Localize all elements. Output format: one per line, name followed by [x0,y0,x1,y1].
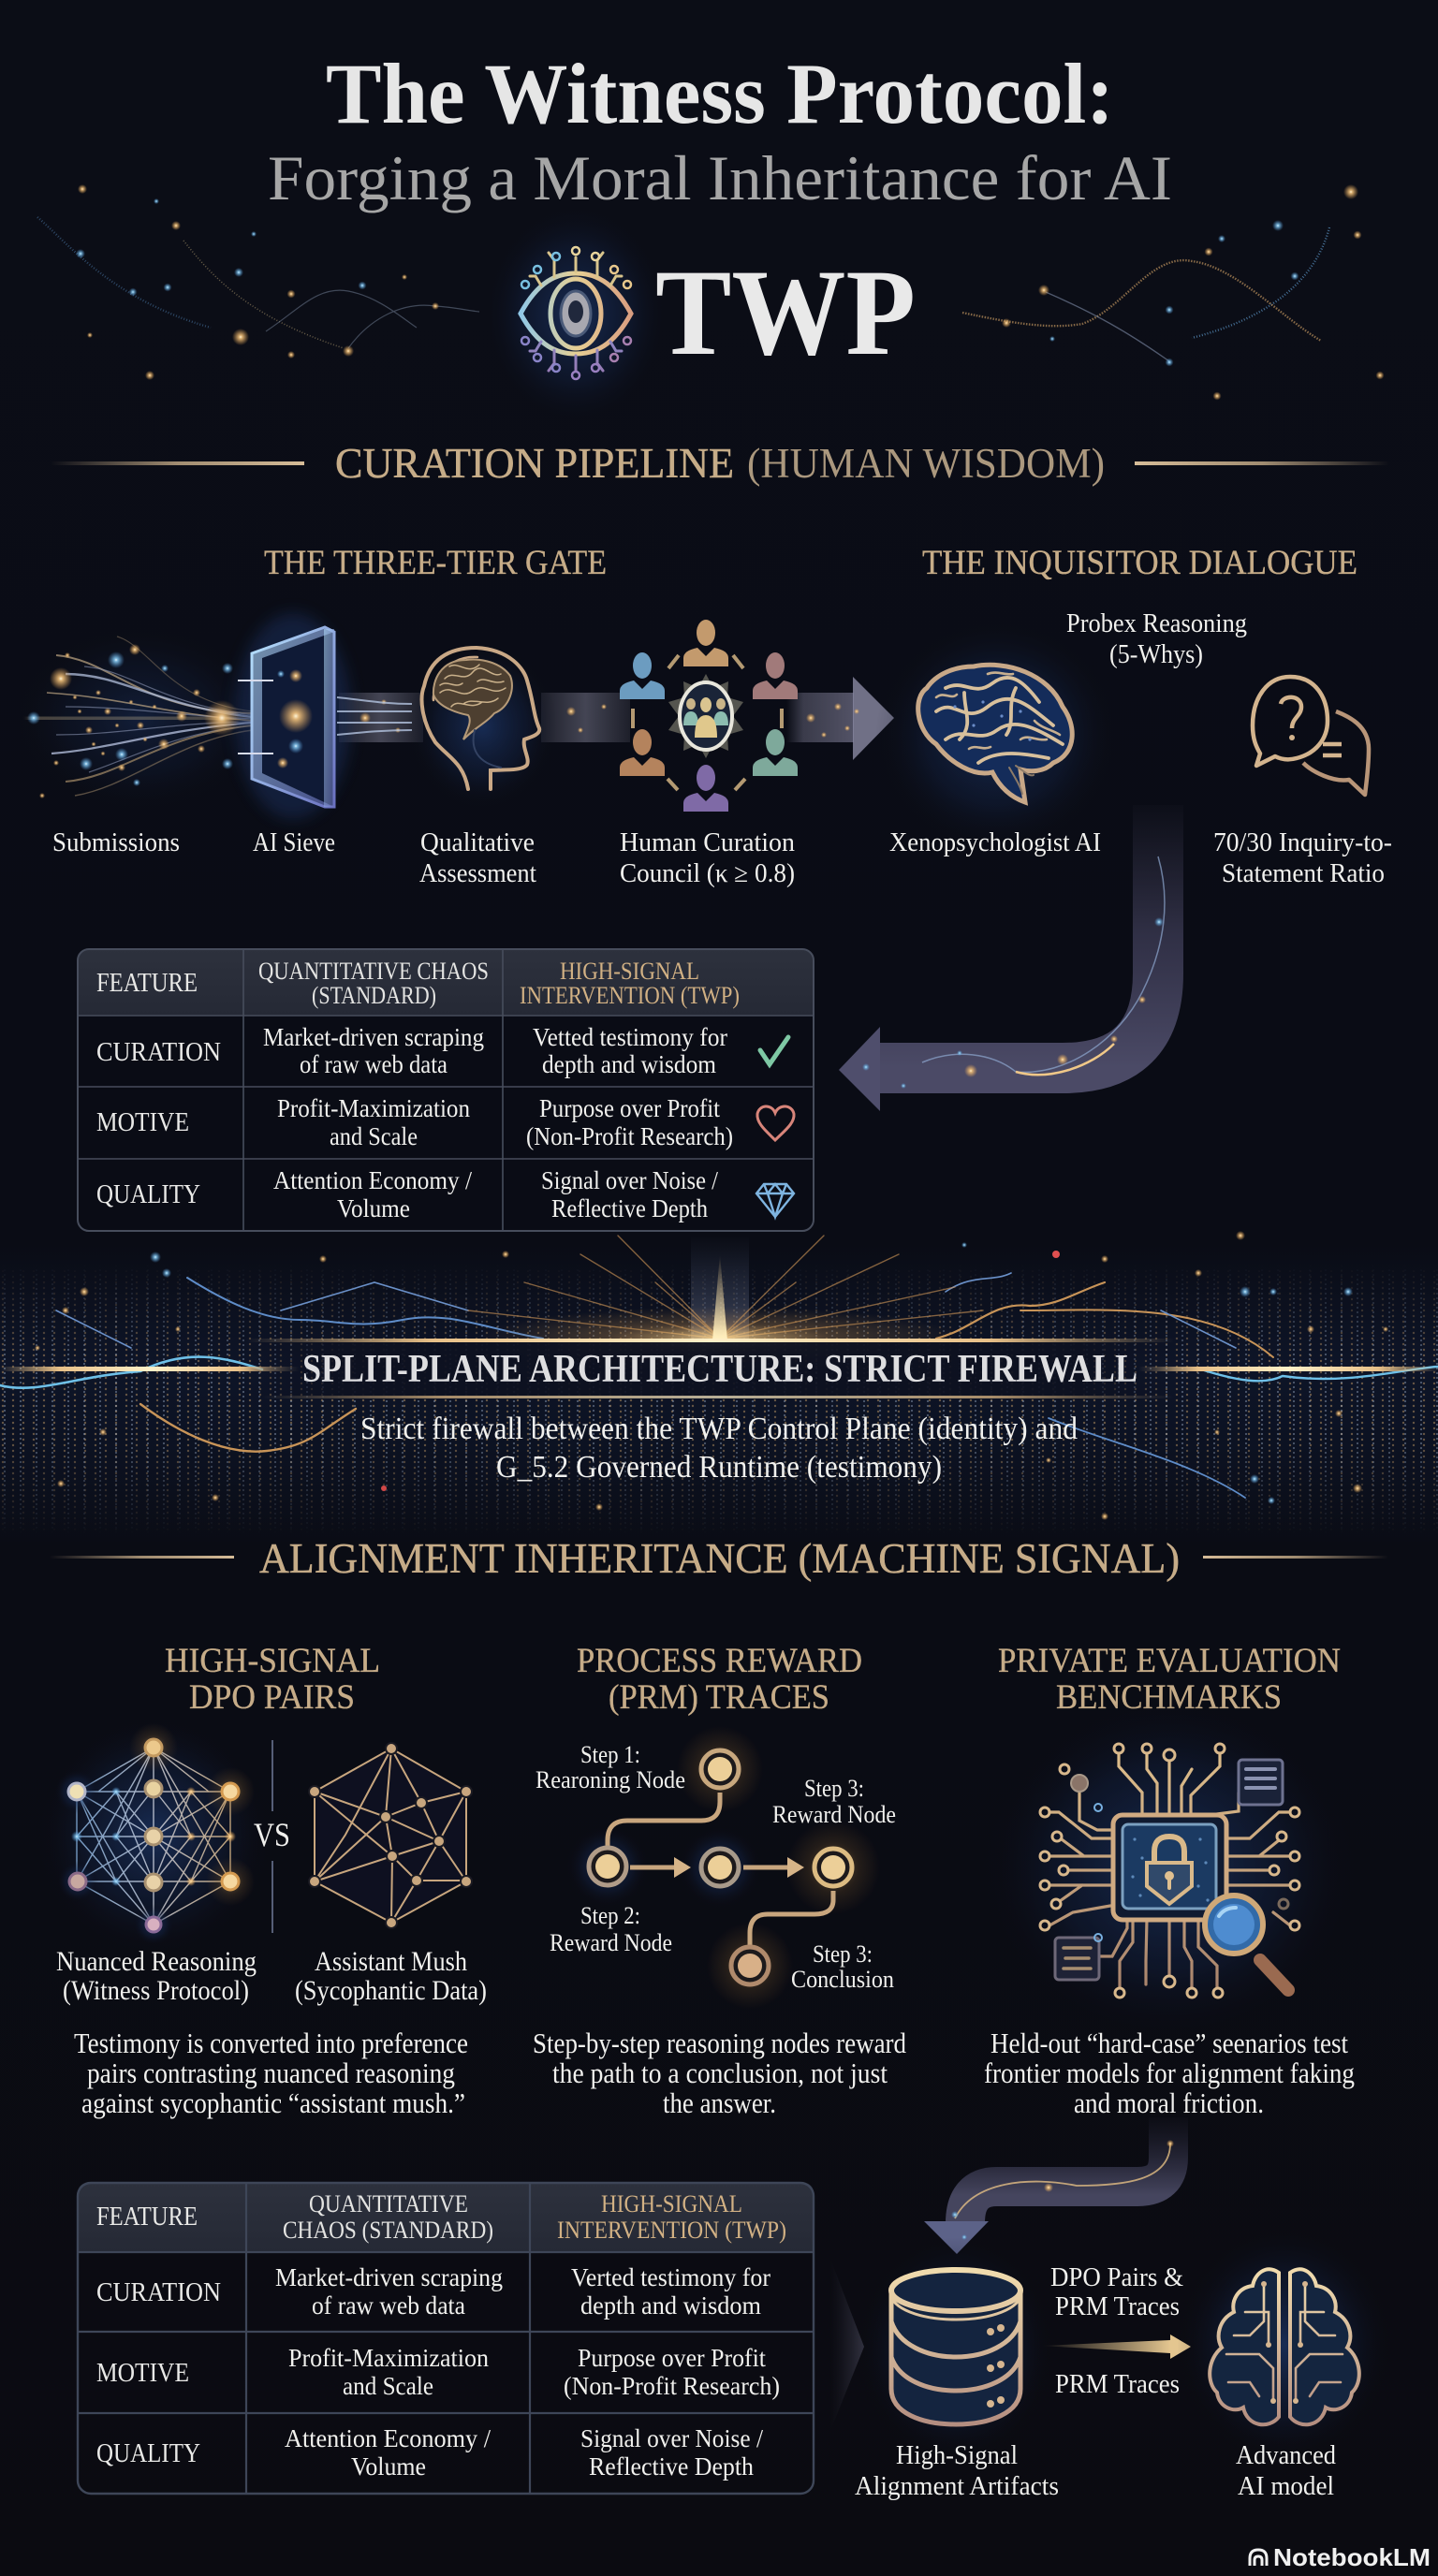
table: curation comparison: HIGH-SIGNAL [560,958,699,985]
label: AI sieve: AI Sieve [253,828,335,857]
table: machine signal comparison: FEATURE [96,2203,198,2232]
icon: database of artifacts [858,2237,1054,2462]
label: pairs and traces: PRM Traces [1055,2292,1180,2321]
sub-heading: high-signal DPO pairs: HIGH-SIGNAL [165,1642,380,1680]
title: The Witness Protocol: [326,46,1114,141]
sub-heading: three-tier gate: THE THREE-TIER GATE [264,544,607,582]
label: step 3 reward node: Reward Node [772,1801,896,1828]
table: machine signal comparison: Market-driven scraping [275,2263,503,2291]
table: machine signal comparison: QUALITY [96,2439,200,2468]
text: DPO pairs description [74,2027,468,2119]
label: inquiry to statement ratio [1213,828,1392,888]
sub-heading: process reward traces: (PRM) TRACES [609,1678,829,1717]
text: PRM description: the path to a conclusion, not just [552,2056,888,2089]
label: step 3 reward node [772,1775,896,1828]
table: machine signal comparison [78,2183,814,2494]
hero particle waves [37,184,1384,401]
label: assistant mush: Assistant Mush [315,1946,467,1977]
label: advanced AI model: AI model [1238,2472,1334,2501]
text: private evaluation description: and moral friction. [1074,2086,1264,2119]
table: curation comparison: of raw web data [300,1050,448,1078]
table: curation comparison: MOTIVE [96,1108,189,1137]
table: machine signal comparison: QUANTITATIVE [309,2190,468,2217]
text: private evaluation description: frontier models for alignment faking [984,2056,1355,2089]
label: probex reasoning: Probex Reasoning [1066,609,1247,638]
firewall description [360,1412,1078,1485]
text: private evaluation description [984,2027,1355,2119]
label: nuanced reasoning [56,1946,257,2006]
sub-heading: private evaluation benchmarks: BENCHMARKS [1056,1678,1282,1717]
table: curation comparison: Market-driven scraping [263,1023,484,1051]
sub-heading: process reward traces: PROCESS REWARD [577,1642,862,1680]
label: assistant mush [295,1946,487,2006]
table: machine signal comparison: Attention Economy / [285,2424,491,2452]
table: machine signal comparison: depth and wisdom [580,2291,761,2320]
text: PRM description: the answer. [663,2086,776,2119]
label: step 3 conclusion: Step 3: [813,1940,873,1968]
label: assistant mush: (Sycophantic Data) [295,1975,487,2006]
table: curation comparison: FEATURE [96,969,198,998]
label: step 2 reward node [550,1902,672,1956]
table: machine signal comparison: MOTIVE [96,2359,189,2388]
table: curation comparison: Profit-Maximization [277,1094,470,1122]
firewall background energy band [0,1231,1438,1544]
label: step 3 conclusion [791,1940,894,1993]
table: machine signal comparison: CHAOS (STANDARD) [283,2217,493,2244]
table: curation comparison: and Scale [330,1122,418,1150]
icon: xenopsychologist brain [875,618,1119,852]
table: machine signal comparison: Purpose over Profit [578,2344,766,2372]
label: advanced AI model [1236,2441,1336,2501]
table: machine signal comparison: Reflective Depth [589,2452,754,2481]
icon: diamond [756,1184,794,1217]
text: PRM description: Step-by-step reasoning nodes reward [533,2027,906,2059]
section heading: curation pipeline: (HUMAN WISDOM) [747,440,1105,487]
table: machine signal comparison: INTERVENTION (TWP) [557,2217,786,2244]
label: human curation council: Council (κ ≥ 0.8) [620,859,795,888]
table: machine signal comparison: and Scale [343,2372,433,2400]
table: machine signal comparison: Volume [351,2452,426,2481]
icon: advanced AI brain [1177,2228,1392,2462]
banner: split-plane strict firewall: SPLIT-PLANE ARCHITECTURE: STRICT FIREWALL [302,1348,1137,1391]
sub-heading: inquisitor dialogue: THE INQUISITOR DIALOGUE [922,544,1357,582]
section heading: alignment inheritance: ALIGNMENT INHERITANCE (MACHINE SIGNAL) [259,1535,1180,1582]
icon: qualitative assessment head [407,641,557,810]
label: inquiry to statement ratio: 70/30 Inquiry-to- [1213,828,1392,857]
network: assistant mush [309,1743,472,1928]
text: DPO pairs description: against sycophantic “assistant mush.” [81,2086,465,2119]
table: machine signal comparison: Signal over Noise / [580,2424,763,2452]
icon: inquiry speech bubbles [1253,677,1369,795]
icon: check mark [760,1037,788,1064]
label: probex reasoning [1066,609,1247,669]
table: machine signal comparison: Verted testimony for [571,2263,770,2291]
label: high-signal alignment artifacts: Alignment Artifacts [855,2472,1059,2501]
label: step 3 conclusion: Conclusion [791,1966,894,1993]
label: high-signal alignment artifacts: High-Signal [896,2441,1018,2470]
icon: heart [757,1106,794,1140]
table: curation comparison: INTERVENTION (TWP) [520,982,740,1009]
label: pairs and traces: DPO Pairs & [1050,2263,1183,2292]
label: qualitative assessment: Assessment [419,859,536,888]
label: inquiry to statement ratio: Statement Ratio [1222,859,1385,888]
pipeline flow bands [339,677,894,760]
icon: human curation council [620,620,798,812]
label: PRM traces: PRM Traces [1055,2370,1180,2399]
label: submissions: Submissions [52,828,180,857]
label: step 1 reasoning node: Step 1: [580,1741,640,1768]
label: step 1 reasoning node [536,1741,685,1793]
icon: submissions data stream [14,624,267,812]
arrow: artifacts to AI model [1041,2334,1191,2359]
table: curation comparison: Volume [337,1194,410,1222]
table: curation comparison: Vetted testimony for [533,1023,727,1051]
label: probex reasoning: (5-Whys) [1109,640,1203,669]
text: private evaluation description: Held-out “hard-case” seenarios test [990,2027,1348,2059]
table: curation comparison: QUANTITATIVE CHAOS [258,958,489,985]
label: nuanced reasoning: Nuanced Reasoning [56,1946,257,1977]
table: curation comparison: QUALITY [96,1180,200,1209]
label: human curation council [620,828,795,888]
label: human curation council: Human Curation [620,828,795,857]
arrow: table to artifacts [830,2259,864,2431]
table: curation comparison: Purpose over Profit [539,1094,720,1122]
network: nuanced reasoning [37,1713,271,1956]
logo wordmark TWP: TWP [655,243,916,381]
banner: split-plane strict firewall [0,1339,1438,1398]
text: DPO pairs description: Testimony is converted into preference [74,2027,468,2059]
VS divider: VS [254,1816,290,1853]
label: nuanced reasoning: (Witness Protocol) [63,1975,249,2006]
label: step 2 reward node: Reward Node [550,1929,672,1956]
table: machine signal comparison: of raw web data [312,2291,465,2320]
table: machine signal comparison: Profit-Maximization [288,2344,489,2372]
label: advanced AI model: Advanced [1236,2441,1336,2470]
table: curation comparison: (STANDARD) [312,982,436,1009]
icon: circuit eye logo [482,201,669,426]
arrow: inquisitor dialogue to table [839,805,1165,1111]
table: curation comparison: Reflective Depth [551,1194,708,1222]
icon: secure benchmark chip [982,1694,1357,2041]
table: curation comparison [78,949,814,1231]
table: curation comparison: Attention Economy / [273,1166,472,1194]
table: machine signal comparison: (Non-Profit Research) [564,2372,780,2400]
table: machine signal comparison: HIGH-SIGNAL [601,2190,742,2217]
stream passing through the sieve [281,697,412,735]
sub-heading: high-signal DPO pairs [165,1642,380,1717]
label: step 1 reasoning node: Rearoning Node [536,1766,685,1793]
firewall description: Strict firewall between the TWP Control Plane (identity) and [360,1412,1078,1446]
table: curation comparison: Signal over Noise / [541,1166,718,1194]
label: qualitative assessment: Qualitative [420,828,535,857]
sub-heading: private evaluation benchmarks [998,1642,1341,1717]
sub-heading: process reward traces [577,1642,862,1717]
section heading: curation pipeline [51,440,1389,487]
diagram: PRM trace nodes [566,1726,880,2009]
label: step 2 reward node: Step 2: [580,1902,640,1929]
label: step 3 reward node: Step 3: [804,1775,864,1802]
label: high-signal alignment artifacts [855,2441,1059,2501]
text: PRM description [533,2027,906,2119]
label: pairs and traces [1050,2263,1183,2321]
NotebookLM watermark: NotebookLM [1273,2543,1431,2571]
label: qualitative assessment [419,828,536,888]
sub-heading: private evaluation benchmarks: PRIVATE EVALUATION [998,1642,1341,1680]
table: curation comparison: depth and wisdom [542,1050,716,1078]
section heading: curation pipeline: CURATION PIPELINE [335,440,734,487]
subtitle: Forging a Moral Inheritance for AI [268,142,1172,213]
arrow: benchmarks to artifacts [924,2117,1174,2254]
icon: AI sieve panel [235,613,351,819]
text: DPO pairs description: pairs contrasting nuanced reasoning [87,2056,455,2089]
label: xenopsychologist AI: Xenopsychologist AI [889,828,1101,857]
firewall description: G_5.2 Governed Runtime (testimony) [496,1450,942,1485]
table: machine signal comparison: CURATION [96,2278,221,2307]
table: curation comparison: CURATION [96,1038,221,1067]
table: curation comparison: (Non-Profit Research) [526,1122,733,1150]
sub-heading: high-signal DPO pairs: DPO PAIRS [189,1678,355,1717]
